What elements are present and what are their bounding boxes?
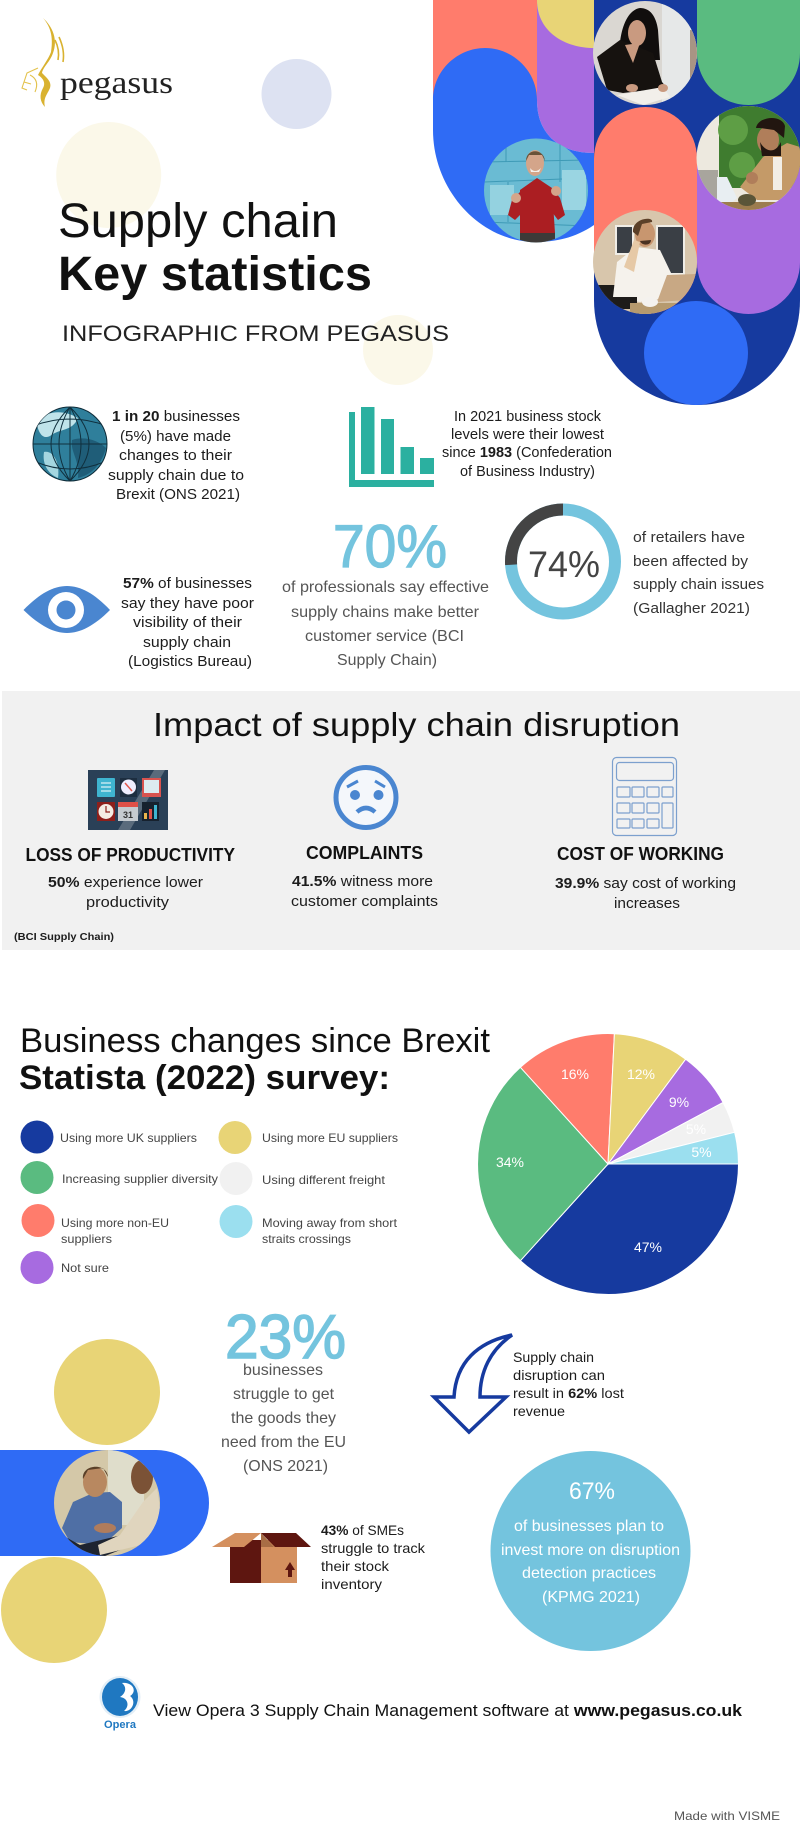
- text: SMEs inventory: [321, 1522, 426, 1592]
- chart legend: Using more UK suppliers: [60, 1131, 197, 1145]
- title: Key statistics: [58, 248, 372, 301]
- text: poor visibility: supply chain: [143, 634, 231, 651]
- icon: dashboard tablet: [88, 770, 168, 830]
- text: retailers affected: [633, 529, 764, 617]
- icon: dashboard tablet: 31: [123, 810, 133, 820]
- icon: Opera logo: Opera: [104, 1719, 137, 1731]
- title: Supply chain: [58, 195, 338, 248]
- pie chart: 5%: [691, 1144, 712, 1160]
- impact: complaints: [291, 843, 438, 910]
- text: lost revenue: Supply chain: [513, 1349, 594, 1365]
- stat: 23%: struggle to get: [233, 1386, 335, 1403]
- icon: cardboard box: [212, 1533, 311, 1583]
- text: lowest stock levels: levels were their lowest: [451, 426, 605, 443]
- decorative background circles: [56, 59, 433, 385]
- pie chart: [478, 1034, 738, 1294]
- photo: man on phone with laptop: [593, 210, 697, 315]
- impact: cost of working: 39.9% say cost of working: [555, 875, 736, 892]
- text: poor visibility: 57% of businesses: [123, 575, 252, 592]
- donut chart: 74%: [511, 510, 615, 614]
- stat: 70%: of professionals say effective: [282, 579, 489, 596]
- callout: 67% circle: (KPMG 2021): [542, 1589, 640, 1606]
- impact: cost of working: increases: [614, 895, 680, 912]
- photo: two men talking: [54, 1450, 160, 1558]
- text: poor visibility: (Logistics Bureau): [128, 653, 252, 670]
- pie chart: 47%: [634, 1239, 662, 1255]
- photo: cheering man in red: [484, 138, 588, 244]
- stat: 23%: 23%: [225, 1303, 346, 1372]
- text: 1 in 20 businesses: (5%) have made: [120, 428, 231, 445]
- stat: 70%: Supply Chain): [337, 652, 437, 669]
- text: lowest stock levels: In 2021 business stock: [454, 408, 601, 425]
- pie chart: 9%: [669, 1094, 689, 1110]
- logo: pegasus: pegasus: [60, 64, 173, 100]
- impact: loss of productivity: 50% experience lower: [48, 874, 203, 891]
- text: 1 in 20 businesses: 1 in 20 businesses: [112, 408, 240, 425]
- stat: 23%: the goods they: [231, 1410, 336, 1427]
- impact: loss of productivity: LOSS OF PRODUCTIVITY: [26, 845, 235, 865]
- text: lost revenue: revenue: [513, 1403, 565, 1419]
- icon: bar chart: [349, 407, 434, 487]
- donut chart: 74%: 74%: [528, 544, 600, 585]
- text: retailers affected: of retailers have: [633, 529, 745, 546]
- stat: 70%: 70%: [333, 513, 447, 580]
- panel: impact of supply chain disruption: [2, 691, 800, 950]
- impact: complaints: 41.5% witness more: [292, 873, 433, 890]
- text: lost revenue: disruption can: [513, 1367, 605, 1383]
- text: lost revenue: [513, 1349, 624, 1419]
- decorative yellow circles and blue pill: [0, 1339, 209, 1663]
- pie chart: 5%: [686, 1121, 706, 1137]
- callout: 67% circle: [490, 1451, 690, 1651]
- chart legend: suppliers: [61, 1232, 112, 1246]
- chart legend: [20, 1120, 398, 1284]
- text: poor visibility: [121, 575, 254, 670]
- text: SMEs inventory: inventory: [321, 1576, 382, 1592]
- heading: business changes since Brexit: Business changes since Brexit: [20, 1022, 491, 1060]
- stat: 23%: businesses: [243, 1362, 323, 1379]
- call to action: View Opera 3 Supply Chain Management software at www.pegasus.co.uk: [153, 1701, 743, 1720]
- text: 1 in 20 businesses: supply chain due to: [108, 467, 244, 484]
- text: lost revenue: result in 62% lost: [513, 1385, 624, 1401]
- subtitle: INFOGRAPHIC FROM PEGASUS: [62, 321, 449, 346]
- title: [58, 195, 372, 301]
- text: SMEs inventory: 43% of SMEs: [321, 1522, 404, 1538]
- text: retailers affected: (Gallagher 2021): [633, 600, 750, 617]
- icon: worried face: [336, 768, 396, 828]
- source note: (BCI Supply Chain): [14, 931, 114, 943]
- heading: business changes since Brexit: Statista (2022) survey:: [19, 1059, 390, 1097]
- arrow: downward: [434, 1335, 512, 1432]
- text: 1 in 20 businesses: [108, 408, 244, 503]
- impact: complaints: customer complaints: [291, 893, 438, 910]
- chart legend: straits crossings: [262, 1232, 351, 1246]
- pie chart: 12%: [627, 1066, 655, 1082]
- text: poor visibility: say they have poor: [121, 595, 254, 612]
- text: 1 in 20 businesses: changes to their: [119, 447, 232, 464]
- stat: 23%: [221, 1303, 346, 1475]
- stat: 23%: (ONS 2021): [243, 1458, 328, 1475]
- text: lowest stock levels: since 1983 (Confederation: [442, 444, 612, 461]
- chart legend: Increasing supplier diversity: [62, 1172, 218, 1186]
- text: retailers affected: been affected by: [633, 553, 749, 570]
- impact: loss of productivity: productivity: [86, 894, 170, 911]
- credit: Made with VISME: [674, 1809, 780, 1823]
- heading: business changes since Brexit: [19, 1022, 491, 1097]
- text: lowest stock levels: of Business Industry): [460, 463, 595, 480]
- icon: Opera logo: [100, 1676, 140, 1731]
- panel heading: Impact of supply chain disruption: [153, 706, 680, 743]
- stat: 70%: [282, 513, 489, 669]
- pie chart: 34%: [496, 1154, 524, 1170]
- callout: 67% circle: detection practices: [522, 1565, 656, 1582]
- header colour blocks: [433, 0, 800, 405]
- impact: loss of productivity: [26, 845, 235, 911]
- pie chart: 16%: [561, 1066, 589, 1082]
- impact: complaints: COMPLAINTS: [306, 843, 423, 863]
- photo: woman writing: [593, 0, 698, 106]
- stat: 70%: supply chains make better: [291, 604, 480, 621]
- text: 1 in 20 businesses: Brexit (ONS 2021): [116, 486, 240, 503]
- text: retailers affected: supply chain issues: [633, 576, 764, 593]
- text: poor visibility: visibility of their: [133, 614, 242, 631]
- text: lowest stock levels: [442, 408, 612, 480]
- globe icon: [33, 407, 107, 481]
- chart legend: Using different freight: [262, 1173, 386, 1187]
- text: SMEs inventory: struggle to track: [321, 1540, 426, 1556]
- callout: 67% circle: of businesses plan to: [514, 1518, 664, 1535]
- icon: calculator: [612, 758, 676, 836]
- chart legend: Moving away from short: [262, 1216, 398, 1230]
- logo: pegasus: [22, 18, 173, 107]
- callout: 67% circle: 67%: [569, 1478, 615, 1505]
- photo: man with laptop and plants: [696, 106, 800, 212]
- stat: 70%: customer service (BCI: [305, 628, 464, 645]
- chart legend: Not sure: [61, 1261, 109, 1275]
- chart legend: Using more EU suppliers: [262, 1131, 398, 1145]
- text: SMEs inventory: their stock: [321, 1558, 390, 1574]
- impact: cost of working: COST OF WORKING: [557, 844, 724, 864]
- impact: cost of working: [555, 844, 736, 912]
- chart legend: Using more non-EU: [61, 1216, 169, 1230]
- icon: eye: [24, 586, 110, 633]
- callout: 67% circle: invest more on disruption: [501, 1542, 680, 1559]
- stat: 23%: need from the EU: [221, 1434, 346, 1451]
